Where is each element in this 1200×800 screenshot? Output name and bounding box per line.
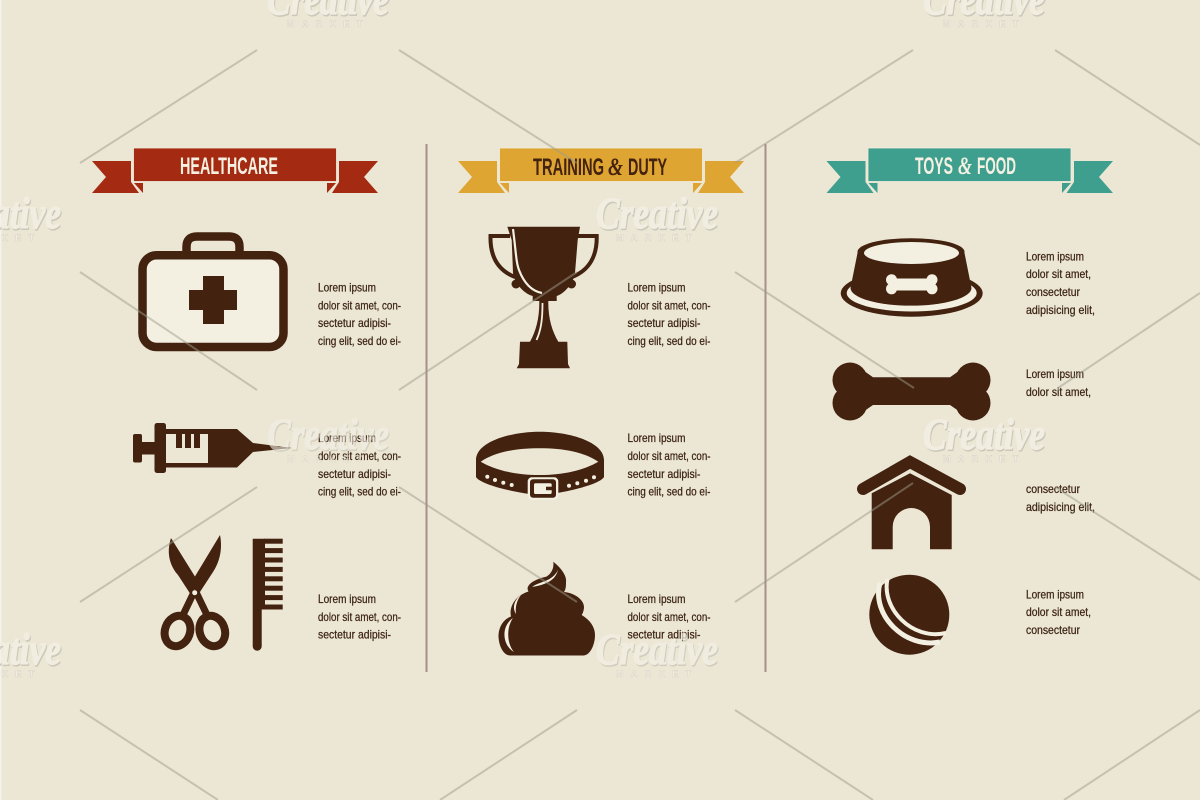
ribbon: training and duty	[458, 148, 744, 193]
text: ball: dolor sit amet,	[1026, 605, 1091, 619]
text: bone: dolor sit amet,	[1026, 385, 1091, 399]
ribbon: toys and food: &	[958, 153, 972, 180]
text: dog bowl: Lorem ipsum	[1026, 250, 1084, 264]
icon: syringe	[133, 423, 292, 473]
text: ball: Lorem ipsum	[1026, 588, 1084, 602]
watermark: centre lower: MARKET	[616, 669, 698, 680]
panel: toys and food	[826, 148, 1113, 655]
icon: first aid kit	[142, 236, 284, 347]
watermark: centre-left middle: MARKET	[287, 454, 369, 465]
divider: right	[764, 144, 766, 672]
panel: training and duty	[458, 148, 744, 656]
text: trophy: Lorem ipsum	[628, 280, 686, 294]
text: first aid: sectetur adipisi-	[318, 316, 391, 330]
icon: collar	[476, 432, 604, 500]
ribbon: training and duty: &	[608, 154, 623, 181]
icon: trophy	[490, 227, 597, 368]
text: trophy: sectetur adipisi-	[628, 316, 700, 330]
text: grooming: sectetur adipisi-	[318, 628, 391, 642]
text: first aid: Lorem ipsum	[318, 280, 376, 294]
text: collar: Lorem ipsum	[628, 431, 686, 445]
text: trophy: cing elit, sed do ei-	[628, 334, 710, 348]
text: bone: Lorem ipsum	[1026, 367, 1084, 381]
watermark: top centre-left: MARKET	[287, 19, 369, 30]
watermark: centre-left middle: Creative	[268, 412, 390, 460]
text: syringe: dolor sit amet, con-	[318, 449, 401, 463]
text: dog poop: dolor sit amet, con-	[628, 610, 710, 624]
icon: comb	[253, 539, 283, 651]
text: ball: consectetur	[1026, 623, 1080, 637]
watermark: centre lower: Creative	[597, 626, 719, 676]
text: syringe: cing elit, sed do ei-	[318, 484, 401, 498]
text: collar: cing elit, sed do ei-	[628, 484, 710, 498]
watermark: centre upper: MARKET	[616, 233, 698, 244]
icon: dog house	[863, 462, 960, 549]
text: syringe: sectetur adipisi-	[318, 467, 391, 481]
watermark: right middle: Creative	[924, 412, 1046, 460]
text: dog poop: sectetur adipisi-	[628, 628, 700, 642]
text: dog house: consectetur	[1026, 482, 1080, 496]
text: grooming: Lorem ipsum	[318, 592, 376, 606]
ribbon: toys and food: FOOD	[977, 153, 1016, 180]
text: collar: dolor sit amet, con-	[628, 449, 710, 463]
ribbon: toys and food	[826, 148, 1113, 193]
ribbon: healthcare: HEALTHCARE	[180, 153, 278, 180]
icon: bone	[832, 362, 990, 420]
icon: ball	[869, 575, 949, 655]
watermark: centre-left middle: Creative	[267, 410, 389, 459]
watermark: right middle: Creative	[923, 410, 1045, 459]
text: dog bowl: adipisicing elit,	[1026, 303, 1095, 317]
watermark: right middle: MARKET	[943, 454, 1025, 465]
watermark: left upper	[0, 189, 62, 244]
text: first aid: cing elit, sed do ei-	[318, 334, 401, 348]
ribbon: training and duty: TRAINING	[533, 154, 604, 181]
ribbon: training and duty: DUTY	[628, 154, 667, 181]
text: grooming: dolor sit amet, con-	[318, 610, 401, 624]
panel: healthcare	[92, 148, 401, 651]
ribbon: toys and food: TOYS	[915, 153, 953, 180]
text: dog bowl: consectetur	[1026, 285, 1080, 299]
text: dog poop: Lorem ipsum	[628, 592, 686, 606]
watermark: top right: MARKET	[943, 19, 1025, 30]
watermark: centre lower: Creative	[596, 625, 718, 674]
icon: dog bowl	[841, 238, 983, 317]
icon: dog poop	[498, 562, 595, 656]
text: collar: sectetur adipisi-	[628, 467, 700, 481]
text: first aid: dolor sit amet, con-	[318, 298, 401, 312]
icon: scissors	[160, 535, 229, 650]
text: trophy: dolor sit amet, con-	[628, 298, 710, 312]
ribbon: healthcare	[92, 148, 378, 193]
divider: left	[426, 144, 428, 672]
text: dog bowl: dolor sit amet,	[1026, 267, 1091, 281]
watermark: centre upper: Creative	[596, 189, 718, 238]
text: syringe: Lorem ipsum	[318, 431, 376, 445]
watermark: left lower	[0, 625, 62, 680]
watermark: centre upper: Creative	[597, 190, 719, 240]
text: dog house: adipisicing elit,	[1026, 500, 1095, 514]
